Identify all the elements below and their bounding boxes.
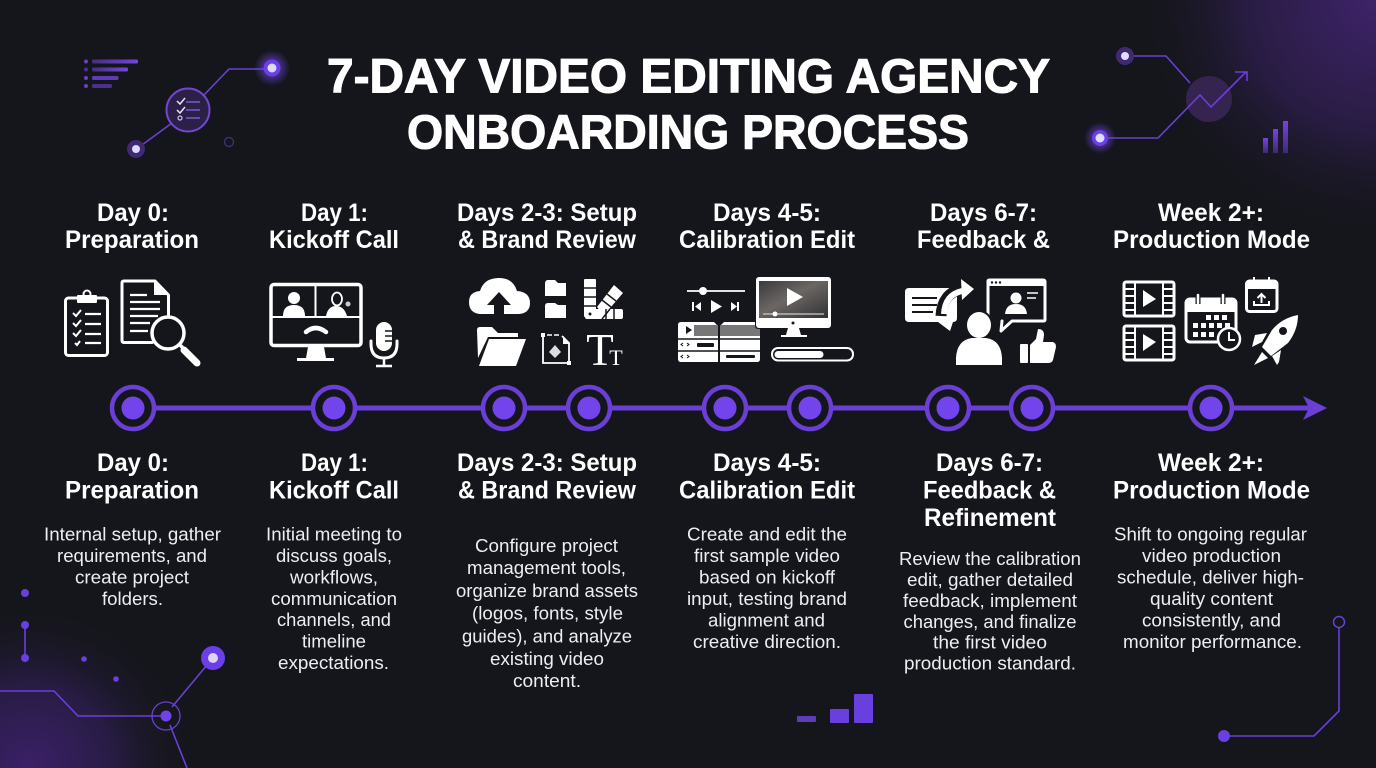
panel: Week 2+ Production Mode [1113,199,1310,652]
icon: cloud upload, folders, swatches, vector file and type: T [586,325,614,375]
title: 7-DAY VIDEO EDITING AGENCY [327,50,1050,104]
heading: Day 0 bottom: Day 0: [97,449,169,477]
heading: Day 1 top: Day 1: [301,199,368,227]
icon: video call monitor and microphone [271,284,397,366]
description: Days 6-7: the first video [933,632,1047,652]
description: Day 1 [266,524,402,673]
description: Day 1: workflows, [289,568,378,588]
heading: Week 2+ bottom: Production Mode [1113,476,1310,504]
heading: Days 6-7 bottom: Days 6-7: [936,449,1043,477]
icon: feedback bubbles, person and thumbs up [905,279,1056,365]
description: Days 4-5: creative direction. [693,632,841,652]
heading: Day 0 bottom: Preparation [65,476,199,504]
timeline node: Week 2+ [1190,387,1232,429]
heading: Day 0 bottom [65,449,199,504]
description: Week 2+: Shift to ongoing regular [1114,524,1307,544]
heading: Week 2+ top: Production Mode [1113,226,1310,254]
icon: film strips, calendars and rocket [1124,277,1298,365]
heading: Day 0 top [65,199,199,254]
description: Day 1: discuss goals, [276,546,392,566]
title: ONBOARDING PROCESS [407,106,969,160]
heading: Days 6-7 top: Feedback & [917,226,1050,254]
panel: Days 6-7 Feedback and Refinement [899,199,1081,674]
title [327,50,1050,160]
timeline nodes: Days 6-7 [927,387,1053,429]
timeline nodes: Days 4-5 [704,387,831,429]
description: Day 0 [44,524,221,609]
description: Days 6-7: feedback, implement [903,591,1077,611]
description: Days 2-3: guides), and analyze [462,626,632,646]
description: Days 4-5: alignment and [708,610,825,630]
heading: Week 2+ top: Week 2+: [1158,199,1264,227]
description: Days 2-3: content. [513,671,581,691]
heading: Week 2+ bottom [1113,449,1310,504]
heading: Days 2-3 bottom: & Brand Review [458,476,637,504]
heading: Week 2+ top [1113,199,1310,254]
icon: editing timeline, player controls, monitor and progress bar [678,276,853,362]
description: Days 2-3: Configure project [475,536,618,556]
timeline node: Day 1 [313,387,355,429]
heading: Day 1 bottom: Day 1: [301,449,368,477]
description: Week 2+: video production [1142,546,1281,566]
description: Days 6-7: Review the calibration [899,549,1081,569]
heading: Week 2+ bottom: Week 2+: [1158,449,1264,477]
heading: Day 1 top [269,199,399,254]
decoration: top-right growth chart network [1084,47,1288,154]
description: Day 1: expectations. [278,653,389,673]
panel: Days 2-3 Setup and Brand Review [456,199,638,691]
heading: Days 2-3 top: & Brand Review [458,226,637,254]
decoration: bottom-centre bars [797,694,873,723]
heading: Days 6-7 bottom: Refinement [924,504,1057,532]
heading: Day 1 bottom [269,449,399,504]
heading: Days 4-5 bottom [679,449,856,504]
heading: Days 2-3 bottom: Days 2-3: Setup [457,449,637,477]
description: Days 2-3: management tools, [467,558,626,578]
description: Week 2+: quality content [1150,589,1273,609]
heading: Day 1 top: Kickoff Call [269,226,399,254]
description: Day 1: Initial meeting to [266,524,402,544]
description: Days 4-5: first sample video [694,546,840,566]
description: Day 0: folders. [102,589,163,609]
description: Days 2-3 [456,536,638,691]
timeline nodes: Days 2-3 [483,387,610,429]
heading: Days 4-5 top: Days 4-5: [713,199,821,227]
timeline arrow [133,396,1327,420]
description: Days 2-3: existing video [490,649,604,669]
decoration: bottom-left circuit network [0,589,225,768]
panel: Days 4-5 Calibration Edit [678,199,856,652]
description: Week 2+: schedule, deliver high- [1117,568,1304,588]
heading: Days 6-7 top: Days 6-7: [930,199,1037,227]
description: Days 6-7: production standard. [904,654,1076,674]
description: Week 2+: consistently, and [1142,610,1281,630]
heading: Days 6-7 bottom [923,449,1057,532]
description: Day 1: channels, and [277,610,391,630]
decoration: bottom-right circuit [1218,616,1344,742]
description: Days 2-3: organize brand assets [456,581,638,601]
timeline node: Day 0 [112,387,154,429]
description: Days 6-7 [899,549,1081,674]
icon: cloud upload, folders, swatches, vector file and type [469,278,623,375]
heading: Days 2-3 top: Days 2-3: Setup [457,199,637,227]
decoration: top-left checklist network [84,50,290,158]
description: Week 2+ [1114,524,1307,652]
heading: Days 4-5 top: Calibration Edit [679,226,856,254]
description: Day 0: Internal setup, gather [44,524,221,544]
heading: Day 0 top: Preparation [65,226,199,254]
heading: Day 0 top: Day 0: [97,199,169,227]
description: Days 2-3: (logos, fonts, style [472,604,623,624]
heading: Days 6-7 top [917,199,1050,254]
description: Days 6-7: edit, gather detailed [907,570,1073,590]
description: Days 6-7: changes, and finalize [904,612,1076,632]
description: Days 4-5: input, testing brand [687,589,847,609]
icon: clipboard and document with magnifier [66,280,197,363]
heading: Days 2-3 bottom [457,449,637,504]
icon: cloud upload, folders, swatches, vector file and type: T [609,345,623,370]
heading: Days 4-5 bottom: Days 4-5: [713,449,821,477]
description: Day 0: create project [75,568,189,588]
heading: Days 2-3 top [457,199,637,254]
description: Days 4-5 [687,524,847,652]
panel: Day 0 Preparation [44,199,221,609]
description: Week 2+: monitor performance. [1123,632,1302,652]
heading: Days 4-5 top [679,199,856,254]
heading: Days 4-5 bottom: Calibration Edit [679,476,856,504]
description: Day 1: communication [271,589,397,609]
panel: Day 1 Kickoff Call [266,199,402,673]
description: Days 4-5: based on kickoff [699,568,836,588]
description: Day 0: requirements, and [57,546,207,566]
description: Days 4-5: Create and edit the [687,524,847,544]
heading: Days 6-7 bottom: Feedback & [923,476,1056,504]
description: Day 1: timeline [302,632,366,652]
heading: Day 1 bottom: Kickoff Call [269,476,399,504]
